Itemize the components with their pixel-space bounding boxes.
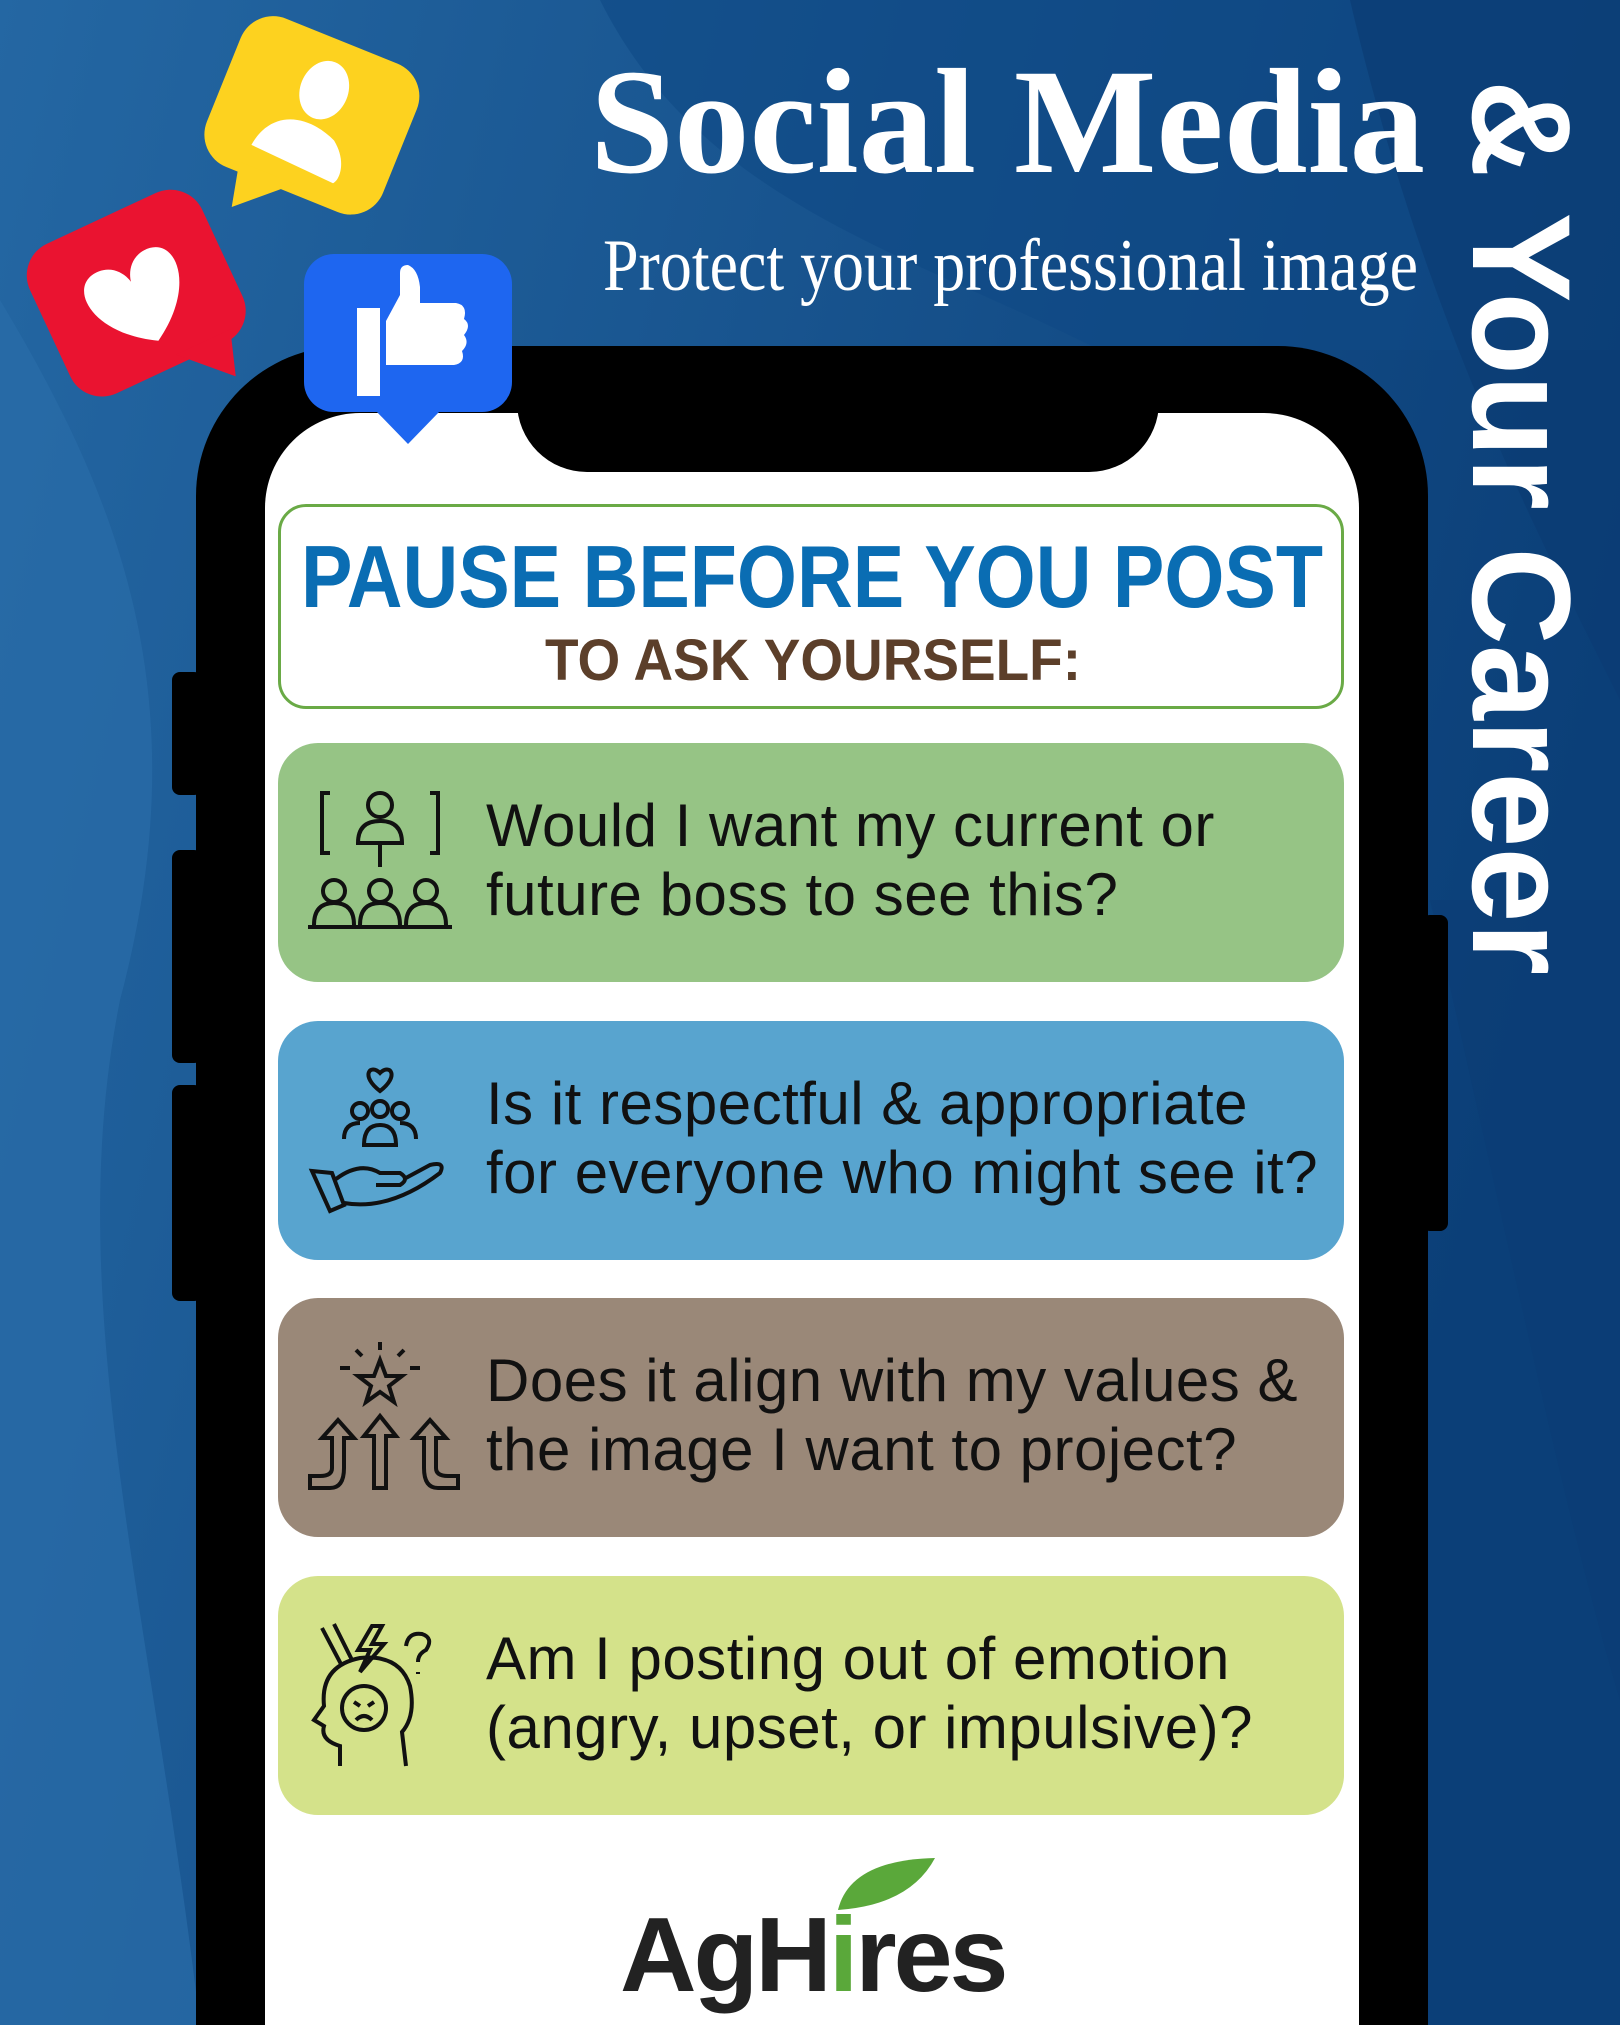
question 1: Would I want my current or: [486, 792, 1215, 859]
question 2: for everyone who might see it?: [486, 1139, 1318, 1206]
header box: [278, 504, 1344, 709]
icon: angry head: [311, 1623, 432, 1766]
icon: red heart bubble: [26, 190, 246, 396]
icon: hand holding people: [308, 1068, 444, 1214]
logo: AgHires: AgHires: [620, 1896, 1005, 2014]
icon: yellow person bubble: [204, 16, 420, 215]
card 1: [278, 743, 1344, 982]
card 3: [278, 1298, 1344, 1537]
question 4: (angry, upset, or impulsive)?: [486, 1694, 1253, 1761]
card 4: [278, 1576, 1344, 1815]
question 2: [486, 1070, 1318, 1206]
icon: blue like bubble: [304, 254, 512, 444]
question 4: [486, 1625, 1253, 1761]
question 3: the image I want to project?: [486, 1416, 1237, 1483]
question 4: Am I posting out of emotion: [486, 1625, 1230, 1692]
icon: star and arrows: [308, 1342, 460, 1490]
question 1: [486, 792, 1215, 928]
question 2: Is it respectful & appropriate: [486, 1070, 1248, 1137]
icon: leaf: [838, 1858, 935, 1910]
question 3: [486, 1347, 1298, 1483]
question 1: future boss to see this?: [486, 861, 1118, 928]
card 2: [278, 1021, 1344, 1260]
question 3: Does it align with my values &: [486, 1347, 1298, 1414]
icon: boss and team: [308, 791, 452, 929]
